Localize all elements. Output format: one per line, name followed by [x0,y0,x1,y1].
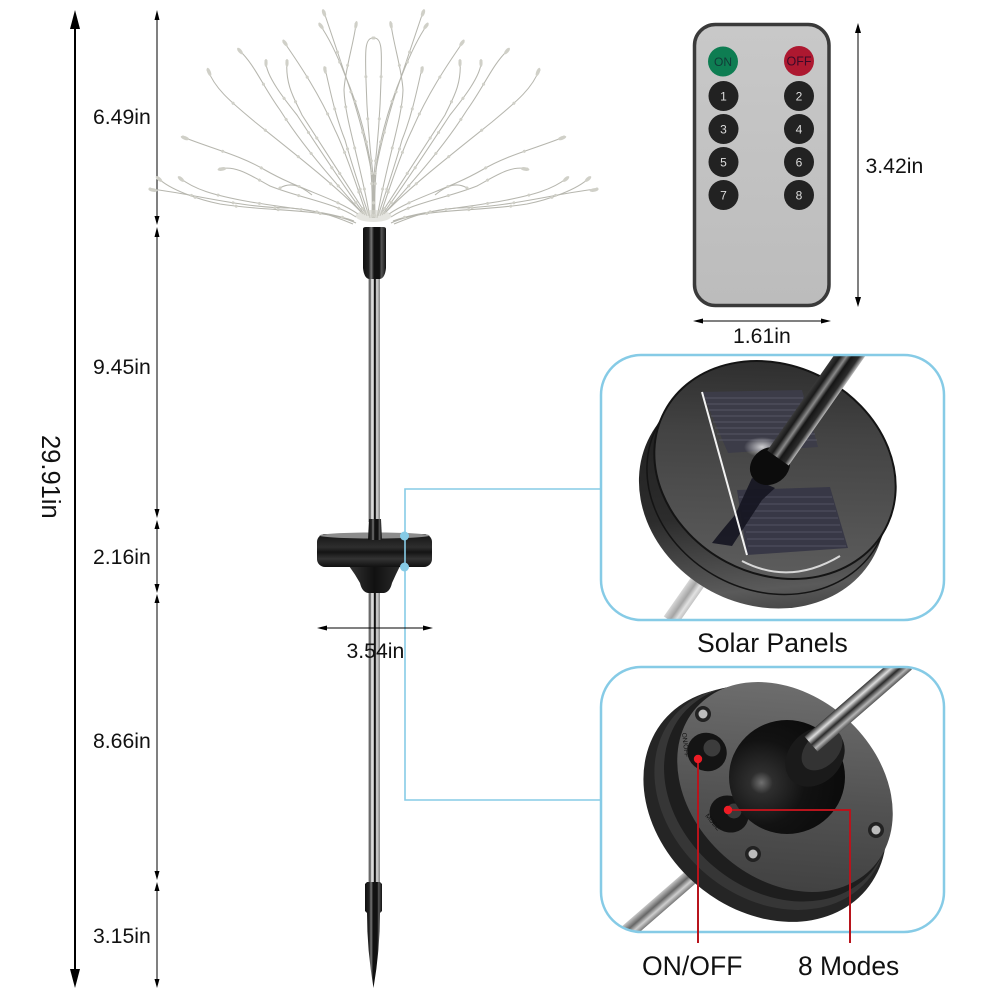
disc top face [654,360,897,580]
connector lines from disc to detail panels [400,489,601,800]
dimension labels: segment heights [93,106,151,948]
collar glow [745,438,774,456]
rod collar [750,447,790,485]
lower steel rod [622,872,696,931]
dimension labels: segment heights: 6.49in [93,106,151,129]
solar cell upper [702,390,818,453]
dimension: disc width [317,626,433,630]
button: OFF: OFF [786,54,812,68]
remote control [694,24,829,306]
callout line: 8 Modes [724,806,850,943]
dimension label: 3.54in: 3.54in [346,640,404,663]
solar cell lower [737,487,848,555]
white edge line [702,392,747,555]
dimension labels: segment heights: 8.66in [93,730,151,753]
disc side wall [638,424,882,608]
screws [695,706,884,862]
MODE button: MODE [703,813,722,833]
dome neck [790,729,845,786]
dimension labels: segment heights: 9.45in [93,356,151,379]
dark rod [768,356,865,466]
base plate [677,682,893,892]
button: OFF [784,46,814,76]
button: ON [708,46,738,76]
dimension: total height arrow [70,10,80,988]
number buttons 1 to 8: 5 [720,156,727,170]
dimension labels: segment heights: 3.15in [93,925,151,948]
number buttons 1 to 8: 2 [796,90,803,104]
dimension labels: segment heights: 2.16in [93,546,151,569]
lower steel rod [664,578,704,619]
dimension label: 3.42in: 3.42in [866,155,923,178]
MODE button [706,796,748,832]
steel rod [804,668,912,752]
number buttons 1 to 8: 6 [796,156,803,170]
number buttons 1 to 8: 7 [720,188,727,202]
callout line: ON/OFF [694,755,702,943]
panel: buttons detail [600,666,946,934]
rod shadow on face [712,478,775,546]
dimension: remote height [855,23,861,307]
dimension label: 29.91in: 29.91in [36,435,64,519]
number buttons 1 to 8: 8 [796,188,803,202]
dimension label: 1.61in: 1.61in [733,325,791,348]
number buttons 1 to 8: 1 [720,90,727,104]
dome [729,720,845,834]
panel: solar panels detail [600,354,946,622]
ON/OFF button: ON/OFF [680,732,690,758]
dimension line: segmented height arrows [154,10,160,988]
ON/OFF button [682,732,727,772]
number buttons 1 to 8 [708,81,814,210]
caption: ON/OFF: ON/OFF [642,951,742,981]
firework light head: fibre strands [148,9,599,224]
caption: Solar Panels: Solar Panels [697,628,848,658]
button: ON: ON [714,55,732,69]
disc body [643,690,885,922]
face highlight [742,556,840,572]
number buttons 1 to 8: 4 [796,122,803,136]
caption: 8 Modes: 8 Modes [798,951,899,981]
stake: rods, holder, solar disc and spike [317,227,432,988]
dimension: remote width [693,318,831,324]
number buttons 1 to 8: 3 [720,122,727,136]
